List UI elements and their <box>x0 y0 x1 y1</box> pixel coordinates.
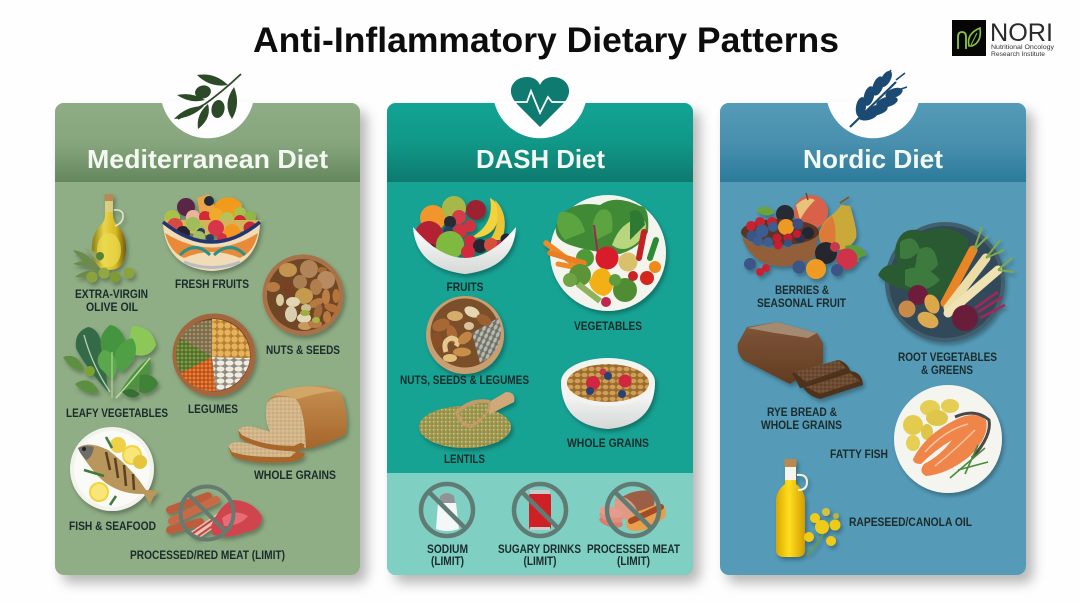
item: sodium, limit: SODIUM <box>427 544 468 556</box>
item: sugary drinks, limit <box>498 484 581 568</box>
item: sodium, limit: (LIMIT) <box>431 556 464 568</box>
item: processed meat, limit <box>587 484 680 568</box>
item: berries and seasonal fruit <box>741 193 867 310</box>
item: nuts and seeds: NUTS & SEEDS <box>266 345 340 357</box>
heading: Nordic Diet: Nordic Diet <box>803 144 943 174</box>
item: rye bread and whole grains: RYE BREAD & <box>767 407 837 419</box>
item: extra-virgin olive oil: EXTRA-VIRGIN <box>75 289 148 301</box>
limit band <box>387 473 693 575</box>
panel: DASH Diet <box>387 77 693 575</box>
item: extra-virgin olive oil <box>73 194 148 314</box>
item: sugary drinks, limit: SUGARY DRINKS <box>498 544 581 556</box>
heading: DASH Diet: DASH Diet <box>476 144 605 174</box>
item: sugary drinks, limit: (LIMIT) <box>524 556 557 568</box>
logo: NORI <box>952 19 1055 58</box>
item: fruits: FRUITS <box>446 282 484 294</box>
item: fatty fish: FATTY FISH <box>830 449 888 461</box>
logo: NORI: NORI <box>990 19 1053 47</box>
heading: Mediterranean Diet: Mediterranean Diet <box>87 144 328 174</box>
item: root vegetables and greens <box>878 222 1014 377</box>
item: lentils: LENTILS <box>444 454 485 466</box>
item: leafy vegetables <box>63 325 168 420</box>
item: fish and seafood: FISH & SEAFOOD <box>69 521 156 533</box>
item: berries and seasonal fruit: BERRIES & <box>775 285 829 297</box>
item: legumes: LEGUMES <box>188 404 238 416</box>
title: Anti-Inflammatory Dietary Patterns <box>253 21 839 60</box>
item: nuts, seeds and legumes: NUTS, SEEDS & LEGUMES <box>400 375 529 387</box>
item: rye bread and whole grains <box>738 322 863 432</box>
item: whole grains: WHOLE GRAINS <box>254 470 336 482</box>
item: lentils <box>419 392 514 466</box>
item: sodium, limit <box>421 484 473 568</box>
item: whole grain cereal <box>561 358 655 450</box>
panel: Nordic Diet <box>720 69 1026 575</box>
item: whole grain cereal: WHOLE GRAINS <box>567 438 649 450</box>
panel: Mediterranean Diet <box>55 74 360 575</box>
item: rye bread and whole grains: WHOLE GRAINS <box>761 420 842 432</box>
item: rapeseed and canola oil: RAPESEED/CANOLA OIL <box>849 517 972 529</box>
logo: NORI: Nutritional Oncology <box>991 44 1055 51</box>
item: berries and seasonal fruit: SEASONAL FRUIT <box>757 298 846 310</box>
item: vegetables <box>546 195 666 333</box>
item: fresh fruits: FRESH FRUITS <box>175 279 249 291</box>
icon: heart with pulse <box>511 77 569 127</box>
item: root vegetables and greens: ROOT VEGETABLES <box>898 352 997 364</box>
item: processed and red meat, limit: PROCESSED/RED MEAT (LIMIT) <box>130 550 285 562</box>
item: vegetables: VEGETABLES <box>574 321 642 333</box>
item: processed meat, limit: PROCESSED MEAT <box>587 544 680 556</box>
item: fruits <box>413 196 516 294</box>
item: rapeseed and canola oil <box>776 459 972 557</box>
item: fatty fish <box>830 385 1002 493</box>
item: processed meat, limit: (LIMIT) <box>617 556 650 568</box>
item: fish and seafood <box>69 427 159 533</box>
item: extra-virgin olive oil: OLIVE OIL <box>86 302 138 314</box>
item: leafy vegetables: LEAFY VEGETABLES <box>66 408 168 420</box>
item: nuts, seeds and legumes <box>400 296 529 387</box>
item: whole grains <box>228 386 347 482</box>
icon: olive branch <box>174 74 241 129</box>
item: root vegetables and greens: & GREENS <box>921 365 973 377</box>
logo: NORI: Research Institute <box>991 51 1045 58</box>
item: fresh fruits <box>163 194 261 291</box>
item: processed and red meat, limit <box>130 486 285 562</box>
icon: wheat <box>850 69 907 127</box>
item: nuts and seeds <box>262 254 344 357</box>
item: legumes <box>172 314 256 416</box>
